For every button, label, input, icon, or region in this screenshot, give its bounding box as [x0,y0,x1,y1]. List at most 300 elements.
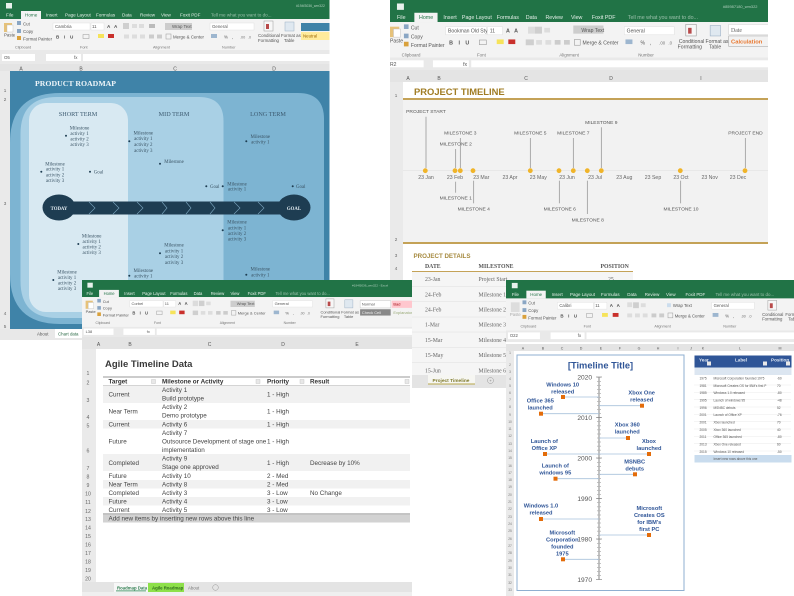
chart: Microsoft history timeline: Office XP [532,446,557,452]
Excel ribbon: #85987180_wm322 [723,4,758,9]
Excel ribbon: Calibri [559,303,571,308]
table: agile timeline data: Activity 8 [162,482,188,488]
Excel ribbon: Table [709,45,721,51]
Excel ribbon: Normal [362,302,375,307]
roadmap milestones: activity 1 [70,132,89,137]
table: project details: Milestone 4 [478,338,506,344]
table: timeline data: Label [735,358,747,362]
Excel ribbon: 4 [4,311,7,316]
Excel ribbon: Copy [528,308,539,313]
chart: Microsoft history timeline: 1990 [577,496,592,503]
roadmap milestones: Milestone [134,131,153,136]
chart: Microsoft history timeline: Microsoft [550,530,575,536]
table: timeline data: Xbox One released [714,442,741,446]
column and row headers: A [406,76,410,82]
column and row headers: 9 [87,483,90,489]
column and row headers: 14 [85,526,91,532]
Excel ribbon: File [6,12,14,18]
roadmap milestones: activity 2 [228,232,247,237]
Excel ribbon: I [568,313,569,318]
Excel ribbon: Merge & Center [173,34,205,40]
column and row headers: 33 [508,588,512,592]
timeline chart [403,98,768,244]
chart: Microsoft history timeline: debuts [625,466,644,472]
roadmap milestones: Goal [94,170,104,176]
column and row headers: 7 [87,466,90,472]
column and row headers: 7 [509,398,511,402]
chart: Microsoft history timeline: Corporation [546,537,579,543]
column and row headers: 6 [509,391,511,395]
roadmap milestones: Milestone [227,221,247,226]
chart: Microsoft history timeline: 1980 [577,536,592,544]
chart: Microsoft history timeline: [Timeline Title] [568,360,633,370]
column and row headers: C [561,346,564,350]
table: project details: MILESTONE [478,264,514,270]
table: project details: 24-Feb [425,308,442,314]
band: mid term [20,97,224,318]
table: project details: 15-Jun [425,368,441,374]
table: agile timeline data: 1 - High [267,460,290,467]
Excel ribbon: I [64,34,65,40]
Excel ribbon: Review [140,12,156,18]
Excel ribbon: Formatting [762,317,783,322]
table: agile timeline data: No Change [310,490,342,497]
table: timeline data: Launch of Office XP [714,413,742,417]
sheet tabs: Chart data [58,332,79,336]
Excel ribbon: Cut [103,299,110,304]
roadmap milestones: Milestone [70,126,89,131]
column and row headers: 20 [85,576,91,582]
panel: Microsoft timeline spreadsheet window [506,280,794,596]
column and row headers: 1 [395,93,398,98]
roadmap milestones: activity 1 [251,273,270,278]
table: timeline data: Office 365 launched [714,435,742,439]
table: agile timeline data: Stage one approved [162,464,219,471]
table: agile timeline data: 3 - Low [267,498,288,506]
Excel ribbon: Page Layout [570,292,596,297]
chart: Microsoft history timeline: Xbox 360 [615,423,640,429]
column and row headers: 9 [509,413,511,417]
column and row headers: 8 [509,405,511,409]
column and row headers: 5 [509,384,511,388]
timeline chart: 23 Apr [502,175,518,181]
Excel ribbon: Number [222,46,236,50]
Excel ribbon: Cut [23,22,31,26]
Excel ribbon: Format Painter [103,312,130,317]
column and row headers: 17 [508,471,512,475]
panel: agile timeline spreadsheet window [82,280,445,596]
heading: mid term: MID TERM [159,111,190,118]
column and row headers: 31 [508,573,512,577]
title: project timeline: PROJECT TIMELINE [414,86,505,97]
Excel ribbon: .00 [240,36,245,40]
column and row headers: E [600,346,603,350]
table: timeline data: Windows 10 released [714,450,744,454]
table: timeline data: Windows 1.0 released [714,391,745,395]
column and row headers: A [97,342,101,348]
column and row headers: 4 [509,377,511,381]
band: short term [29,103,128,312]
column and row headers: I [678,346,679,350]
timeline chart: 23 Jul [588,175,602,181]
table: timeline data: Insert new rows above this one [714,457,758,461]
Excel ribbon: B [449,41,453,47]
chart: Microsoft history timeline: first PC [639,527,659,533]
Excel ribbon: Date [731,28,742,34]
sheet tabs [412,375,506,388]
Excel ribbon: Merge & Center [238,311,266,316]
Excel ribbon: Neutral [303,34,317,38]
table: agile timeline data: Completed [108,460,139,467]
Excel ribbon [506,280,794,342]
Excel ribbon: Alignment [559,52,580,57]
column and row headers: 17 [85,551,91,557]
column and row headers: J [690,346,692,350]
Excel ribbon: Data [627,292,637,297]
Excel ribbon: , [293,311,294,316]
roadmap milestones: Milestone [227,182,247,187]
column and row headers: 20 [508,493,512,497]
Excel ribbon: Table [284,38,295,43]
heading: product roadmap: PRODUCT ROADMAP [35,79,116,88]
roadmap milestones: activity 1 [58,276,77,281]
column and row headers: K [702,346,705,350]
column and row headers: 4 [395,266,398,271]
Excel ribbon: Copy [411,34,423,40]
timeline chart: 23 Dec [730,175,747,181]
table: timeline data: 2011 [700,435,707,439]
column and row headers: G [638,346,641,350]
Excel ribbon: Review [545,15,563,21]
timeline chart: 23 Sep [645,175,661,181]
table: timeline data: 52 [777,406,781,410]
roadmap milestones: Goal [296,185,306,190]
column and row headers: D [609,76,613,82]
chart: Microsoft history timeline: released [529,511,553,517]
table: timeline data: 1985 [700,391,707,395]
chart: Microsoft history timeline: launched [637,446,662,452]
roadmap milestones: Milestone [134,269,153,274]
Excel ribbon: Conditional [679,39,704,45]
chart: Microsoft history timeline: Microsoft [637,506,662,512]
Excel ribbon: Copy [103,306,112,311]
Excel ribbon: Insert [443,15,457,21]
Excel ribbon: Wrap Text [237,301,255,306]
Excel ribbon: File [397,15,406,21]
Excel ribbon: Foxit PDF [592,15,616,21]
Excel ribbon: % [725,313,729,318]
Excel ribbon: A [617,303,621,308]
table: agile timeline data: Build prototype [162,396,205,402]
column and row headers: 19 [85,568,91,574]
timeline chart: MILESTONE 1 [440,196,472,202]
Excel ribbon: Page Layout [142,291,166,296]
Excel ribbon: Formulas [601,292,620,297]
Excel ribbon: 3 [4,201,7,206]
roadmap milestones: activity 3 [228,238,247,243]
Excel ribbon: 11 [165,301,169,306]
Excel ribbon: Merge & Center [675,313,705,318]
table: timeline data: Position [771,358,789,362]
column and row headers: 3 [395,253,398,258]
Excel ribbon: Home [25,12,38,18]
column and row headers: 2 [395,237,398,242]
chart: Microsoft history timeline: 2020 [577,374,592,382]
table: agile timeline data: Activity 5 [162,507,188,514]
Excel ribbon: Explanatory [393,310,414,315]
Excel ribbon: O22 [510,333,519,338]
column and row headers: 19 [508,485,512,489]
roadmap milestones: activity 3 [134,149,153,154]
table: timeline data: 60 [777,442,781,446]
roadmap milestones: activity 1 [134,275,153,280]
table: project details: 15-May [425,353,443,359]
Excel ribbon: 2 [4,97,7,102]
chart: Microsoft history timeline: released [630,398,654,404]
roadmap background [10,71,330,329]
sheet tabs: Roadmap Data [117,586,148,590]
Excel ribbon: U [145,311,148,316]
Excel ribbon: Conditional [762,312,783,317]
Excel ribbon: General [212,24,228,29]
column and row headers: H [657,346,660,350]
timeline chart: MILESTONE 8 [572,218,604,224]
Excel ribbon: Foxit PDF [180,12,201,18]
column and row headers: 25 [508,529,512,533]
Excel ribbon: Clipboard [15,46,31,50]
table: agile timeline data: Near Term [108,482,138,488]
Excel ribbon: Review [645,292,660,297]
chart: Microsoft history timeline: 2000 [577,456,592,462]
Excel ribbon: Formatting [321,314,339,319]
table: agile timeline data: Outsource Development of stage one [162,438,267,446]
column and row headers: 16 [508,464,512,468]
chart: Microsoft history timeline [517,355,684,590]
Excel ribbon: #194f3036_wm322 - Excel [352,283,388,287]
column and row headers: 32 [508,581,512,585]
column and row headers: 13 [508,442,512,446]
table: project details: Milestone 6 [478,368,506,374]
timeline chart: 23 Feb [447,175,463,181]
Excel ribbon [82,280,445,338]
column and row headers: D [281,342,285,348]
column and row headers: 26 [508,537,512,541]
column and row headers: C [524,76,528,82]
column and row headers: 12 [508,434,512,438]
table: agile timeline data: Current [108,392,130,398]
timeline chart: PROJECT END [728,130,763,136]
chart: Microsoft history timeline: for IBM's [637,520,661,526]
column and row headers [506,344,794,596]
table: agile timeline data: 1 - High [267,392,290,398]
Excel ribbon: Cambria [55,24,72,29]
table: project details: 25 [608,277,614,283]
table: agile timeline data: 2 - Med [267,482,289,488]
sheet tabs: + [489,378,492,383]
roadmap milestones: activity 2 [83,245,101,250]
column and row headers: 5 [87,424,90,430]
roadmap milestones: activity 1 [251,141,270,146]
Excel ribbon: File [512,292,520,297]
table: timeline data: -48 [777,398,782,402]
Excel ribbon: Tell me what you want to do... [716,292,774,297]
table: agile timeline data: Activity 6 [162,422,188,428]
roadmap milestones: activity 2 [70,137,89,142]
table: agile timeline data: Activity 3 [162,490,188,497]
timeline chart: MILESTONE 3 [444,130,477,136]
column and row headers: 12 [85,509,91,515]
Excel ribbon: Home [104,291,115,296]
column and row headers: 10 [508,420,512,424]
timeline chart: 23 Nov [701,175,718,181]
Excel ribbon: 1 [4,88,7,93]
chart: Microsoft history timeline: released [551,390,575,396]
column and row headers: 22 [508,507,512,511]
Excel ribbon: Clipboard [521,325,536,329]
column and row headers: 27 [508,544,512,548]
table: timeline data: 2005 [700,428,707,432]
column and row headers: 30 [508,566,512,570]
Excel ribbon: D [272,66,276,72]
Excel ribbon: , [650,41,651,47]
table: agile timeline data: Future [108,498,127,506]
column and row headers: 3 [87,398,90,404]
column and row headers: 4 [87,415,90,421]
roadmap milestones: activity 1 [228,226,247,231]
chart: Microsoft history timeline: founded [551,544,574,550]
table: agile timeline data: Activity 9 [162,456,188,462]
timeline bar with chevrons: TODAY [51,207,68,212]
Excel ribbon: O5 [4,55,10,60]
Excel ribbon: Home [530,292,543,297]
heading: long term: LONG TERM [250,111,286,118]
table: agile timeline data: 1 - High [267,422,290,428]
roadmap milestones [40,126,306,292]
table: project details: POSITION [600,264,630,270]
table: agile timeline data: Result [310,378,330,386]
sheet tabs [0,329,82,340]
Excel ribbon: Page Layout [462,15,492,21]
sheet tabs: About [188,586,200,590]
panel: project timeline spreadsheet window [389,0,794,388]
Excel ribbon: % [285,311,289,316]
roadmap milestones: activity 3 [165,261,184,266]
column and row headers: 1 [87,371,90,377]
roadmap milestones: activity 1 [83,240,101,245]
Excel ribbon: Format as [706,39,729,45]
Excel ribbon: Paste [510,312,521,317]
column and row headers: B [437,76,441,82]
Excel ribbon: Tell me what you want to do... [628,15,698,21]
column and row headers: D [580,346,583,350]
Excel ribbon: Data [122,12,132,18]
table: project details: DATE [425,264,441,270]
Excel ribbon: fx [74,55,78,60]
Excel ribbon: Calculation [731,40,763,46]
table: timeline data: Microsoft Creates OS for IBM's first P [714,384,766,388]
Excel ribbon: Check Cell [362,310,381,315]
Excel ribbon: General [275,301,289,306]
Excel ribbon: Cut [411,26,419,32]
table: agile timeline data: Activity 4 [162,498,188,506]
column and row headers: 8 [87,474,90,480]
column and row headers [82,337,412,582]
roadmap milestones: activity 3 [83,251,101,256]
Excel ribbon: A [19,66,23,72]
column and row headers [390,70,768,280]
Excel ribbon: Alignment [153,46,171,50]
table: timeline data: Microsoft Corporation founded 1975 [714,376,765,380]
sheet tabs: Agile Roadmap [152,586,184,590]
Excel ribbon: Formatting [678,45,702,51]
chart: Microsoft history timeline: 2010 [577,415,592,422]
roadmap milestones: Milestone [82,234,101,239]
Excel ribbon: General [627,28,645,34]
timeline chart: MILESTONE 7 [557,130,590,136]
Excel ribbon: Data [526,15,537,21]
table: project details [412,264,633,375]
Excel ribbon: R2 [390,62,397,68]
timeline bar with chevrons [42,194,310,220]
Excel ribbon: Copy [23,29,34,34]
Excel ribbon: fx [147,329,150,334]
table: agile timeline data: Activity 7 [162,430,188,437]
sheet tabs: Project Timeline [432,378,470,384]
chart: Microsoft history timeline: Xbox One [628,390,655,396]
Excel ribbon: A [114,24,118,29]
column and row headers: M [778,346,782,350]
sheet tabs: About [37,332,49,336]
Excel ribbon: #194f3036_wm322 [296,4,325,8]
table: project details: Milestone 1 [478,292,506,298]
column and row headers: 11 [508,427,512,431]
Excel ribbon: Number [284,321,297,325]
table: timeline data: 2015 [700,450,707,454]
roadmap milestones: activity 1 [46,168,65,173]
roadmap milestones: activity 1 [228,188,247,193]
Excel ribbon: Insert [46,12,58,18]
Excel ribbon: I [458,41,460,47]
Excel ribbon: Home [419,15,433,21]
timeline chart: 23 Jan [418,175,434,181]
column and row headers: 15 [85,534,91,540]
roadmap milestones: Milestone [164,244,184,249]
table: agile timeline data: Add new items by inserting new rows above this line [108,516,255,522]
Excel ribbon: .00 [300,312,305,316]
Excel ribbon: Clipboard [402,52,421,57]
Excel ribbon: C [173,66,177,72]
Excel ribbon: B [79,66,83,72]
column and row headers: 23 [508,515,512,519]
Excel ribbon: Font [477,52,487,57]
chart: Microsoft history timeline: Windows 1.0 [524,504,558,510]
Excel ribbon: Formatting [258,38,280,43]
table: agile timeline data: Milestone or Activity [162,378,224,386]
table: timeline data: -80 [777,391,782,395]
chart: Microsoft history timeline: MSNBC [624,459,645,465]
column and row headers: 2 [87,380,90,386]
table: timeline data: 1995 [700,398,707,402]
table: timeline data: Xbox launched [714,420,735,424]
chart: Microsoft history timeline: windows 95 [538,470,571,476]
roadmap milestones: activity 1 [134,137,153,142]
timeline chart: MILESTONE 2 [440,142,472,148]
Excel ribbon: Paste [390,38,403,44]
table: agile timeline data: Activity 2 [162,404,188,411]
column and row headers: 11 [85,500,91,506]
Excel ribbon: 11 [595,303,600,308]
Excel ribbon: Wrap Text [673,303,693,308]
